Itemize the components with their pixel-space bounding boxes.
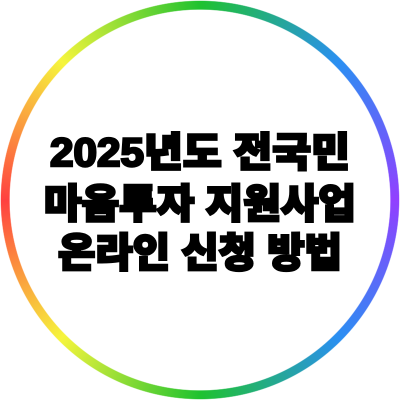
title line 3: 온라인 신청 방법: [58, 232, 342, 276]
title line 1: 2025년도 전국민: [50, 131, 350, 175]
title line 2: 마음투자 지원사업: [44, 182, 356, 226]
